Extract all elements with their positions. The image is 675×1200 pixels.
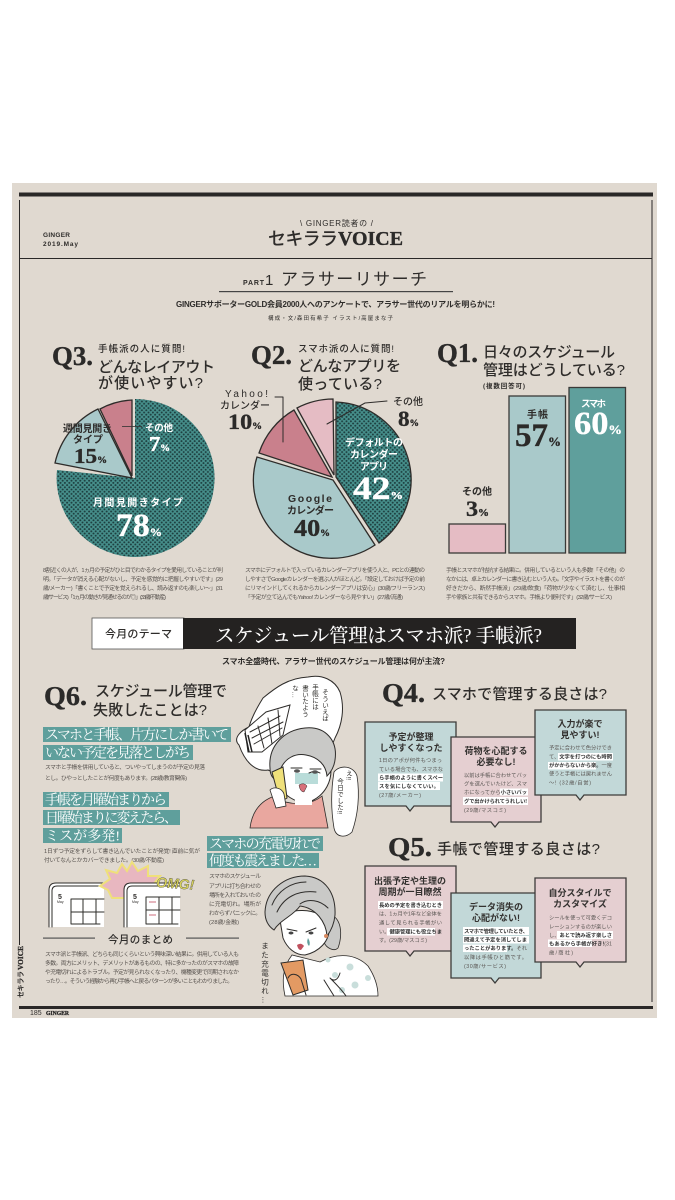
Q2 comment text: スマホにデフォルトで入っているカレンダーアプリを使う人と、PCとの連動の	[245, 566, 425, 574]
highlight: battery: 何度も震えました…	[209, 852, 317, 870]
card: data loss: 間違えて予定を消してしま	[464, 936, 527, 944]
blouse	[283, 955, 378, 996]
pie labels Q3: 週間見開き	[63, 422, 112, 435]
highlight: missed plans: いない予定を見落としがち	[45, 744, 191, 762]
bar labels Q1: 手帳	[527, 408, 548, 421]
card: organized: ら手帳のように書くスペー	[379, 774, 443, 782]
card: overview: す。(29歳/マスコミ)	[379, 936, 427, 944]
comment: missed plans: スマホと手帳を併用していると、ついやってしまうのが予定の見落	[45, 763, 205, 771]
Q3 comment text: 歳/メーカー)「書くことで予定を覚えられるし、読み返すのも楽しい〜」(31	[43, 584, 223, 592]
speech text: 今日でした!!	[336, 777, 344, 814]
card: customize: レーションするのが楽しい	[549, 922, 612, 930]
card: customize: し、あとで読み返す楽しさ	[549, 931, 612, 939]
panel: Q2 app pie	[220, 340, 425, 601]
Q1 heading: Q1.	[437, 338, 478, 368]
pie labels Q2: Google	[288, 493, 332, 505]
Q1 heading: (複数回答可)	[483, 381, 525, 390]
pie labels Q2: カレンダー	[350, 448, 398, 461]
Q1 comment text	[446, 566, 625, 601]
Q6 heading	[44, 681, 227, 719]
Q4 heading	[382, 678, 607, 708]
comment: battery: スマホのスケジュール	[209, 873, 261, 880]
summary heading: 今月のまとめ	[108, 933, 173, 946]
card: customize	[535, 878, 626, 967]
card: customize: 歳/商社)	[549, 948, 573, 956]
summary text: 多数。両方にメリット、デメリットがあるものの、特に多かったのがスマホの故障	[45, 959, 239, 967]
card: luggage: (29歳/マスコミ)	[464, 806, 506, 814]
bar labels Q1: その他	[462, 485, 492, 498]
Q2 heading: Q2.	[251, 340, 292, 370]
theme banner: 今月のテーマ	[105, 626, 172, 640]
page background	[12, 183, 657, 1018]
theme banner	[92, 618, 576, 649]
card: luggage: グで出かけられてうれしい!	[464, 797, 527, 805]
face	[280, 910, 329, 955]
comment: battery	[209, 873, 261, 926]
card: easy input: て、文字を打つのにも時間	[549, 752, 612, 760]
thought text: そういえば	[320, 689, 329, 723]
Q6 heading: Q6.	[44, 681, 87, 711]
Q5 heading: Q5.	[388, 832, 432, 862]
comment: battery: アプリに打ち合わせの	[209, 882, 261, 890]
masthead title: \ GINGER読者の /	[300, 218, 374, 228]
summary text: や充電切れによるトラブル。予定が見られなくなったり、機種変更で同期されなか	[45, 968, 239, 976]
pie labels Q3: 月間見開きタイプ	[93, 497, 183, 509]
Q3 heading	[52, 341, 215, 392]
bar labels Q1: 60%	[574, 406, 622, 442]
Q1 heading: 管理はどうしている?	[483, 361, 625, 379]
pie labels Q2	[220, 389, 423, 542]
section heading	[219, 270, 453, 292]
folio	[30, 1010, 69, 1017]
Q4 heading: スマホで管理する良さは?	[432, 685, 607, 703]
thought text: 書いたよう	[300, 684, 309, 718]
comment: missed plans	[45, 763, 205, 782]
comment: battery: (28歳/金融)	[209, 918, 239, 926]
section heading: アラサーリサーチ	[281, 270, 427, 289]
Q5 heading	[388, 832, 600, 862]
section heading: 1	[265, 272, 273, 289]
card: data loss	[451, 893, 541, 983]
panel: Q5 planner benefits	[365, 832, 626, 983]
illustration: notebook before: May	[57, 900, 64, 904]
card: customize: シールを使って可愛くデコ	[549, 914, 612, 922]
card: easy input: 使うと手帳には戻れません	[549, 770, 612, 778]
illustration: notebook after: 5	[133, 894, 137, 901]
Q1 comment text: なかには、卓上カレンダーに書き込むという人も。「文字やイラストを書くのが	[446, 575, 625, 583]
comment: missed plans: とし。ひやっとしたことが何度もあります。(28歳/教育関係)	[45, 774, 187, 782]
card: overview: は、1ヵ月や1年など全体を	[379, 910, 442, 918]
highlight: week start	[43, 792, 180, 844]
Q3 heading: Q3.	[52, 341, 93, 371]
ponytail	[324, 915, 341, 950]
card: luggage: 必要なし!	[476, 756, 516, 767]
card: organized	[365, 722, 456, 811]
card: easy input	[535, 710, 626, 800]
card: data loss: 心配がない!	[472, 912, 520, 923]
pie labels Q3: 78%	[116, 508, 162, 544]
pie labels Q2: デフォルトの	[345, 436, 403, 449]
pie labels Q3: その他	[145, 422, 173, 434]
thought text	[290, 683, 329, 723]
card: overview: い。健康管理にも役立ちま	[379, 928, 442, 936]
panel: Q3 layout pie	[43, 341, 223, 601]
card: customize: カスタマイズ	[553, 898, 607, 909]
Q2 heading: どんなアプリを	[298, 358, 401, 375]
pie labels Q2: Yahoo!	[225, 389, 268, 400]
bar chart Q1	[449, 388, 626, 553]
phone	[270, 767, 287, 808]
Q1 comment text: 手や家族と共有できるからスマホ。手帳より便利です」(32歳/サービス)	[446, 593, 612, 601]
card: luggage: 以前は手帳に合わせてバッ	[464, 771, 527, 779]
highlight: week start: 手帳を月曜始まりから	[45, 792, 167, 808]
eyes and shadow	[291, 768, 321, 792]
card: organized: スを気にしなくていい。	[379, 782, 439, 790]
Q6 heading: 失敗したことは?	[93, 702, 207, 719]
pie labels Q2: 10%	[228, 409, 262, 434]
pie labels Q2: カレンダー	[220, 399, 270, 412]
folio: 185	[30, 1010, 42, 1017]
panel: Q6 failures	[43, 681, 323, 927]
Q2 heading: 使っている?	[298, 376, 382, 393]
page frame	[19, 192, 653, 1009]
Q5 heading: 手帳で管理する良さは?	[437, 840, 600, 858]
speech bubble	[332, 767, 358, 836]
masthead title	[268, 218, 403, 250]
card: overview: 長めの予定を書き込むとき	[379, 901, 442, 909]
face	[277, 749, 331, 802]
bar labels Q1: 3%	[466, 496, 489, 521]
spine title	[16, 946, 25, 998]
card: overview	[365, 866, 456, 956]
issue label: 2019.May	[43, 241, 78, 248]
card: easy input: 予定に合わせて色分けでき	[549, 744, 612, 752]
illustration: woman on phone	[237, 676, 358, 836]
highlight: battery	[207, 836, 323, 870]
Q1 heading: 日々のスケジュール	[483, 344, 615, 361]
summary text: ったり…。そういう経験から再び手帳へと戻るパターンが多いこともわかりました。	[45, 977, 233, 985]
summary text: スマホ派と手帳派、どちらも同じくらいという興味深い結果に。併用している人も	[45, 950, 239, 958]
pie labels Q2: アプリ	[360, 461, 388, 473]
hair	[270, 728, 335, 780]
card: data loss: データ消失の	[469, 901, 523, 912]
Q2 comment text: にリマインドしてくれるからカレンダーアプリは安心」(30歳/フリーランス)	[245, 584, 425, 592]
card: data loss: スマホで管理していたとき、	[464, 927, 528, 935]
comment: week start	[44, 847, 200, 864]
pie labels Q3: タイプ	[73, 434, 103, 446]
hands	[288, 973, 346, 996]
card: organized: 1日のアポが何件もつまっ	[379, 756, 442, 764]
comment: battery: 場所を入れておいたの	[209, 891, 261, 899]
comment: week start: 1日ずつ予定をずらして書き込んでいたことが発覚! 直前に気が	[44, 847, 200, 855]
card: easy input: 〜! (32歳/自営)	[549, 778, 591, 786]
card: data loss: ったことがあります。それ	[464, 944, 528, 952]
card: customize: もあるから手帳が好き!(31	[549, 940, 612, 948]
pie chart Q3	[55, 399, 215, 557]
Q3 comment text: 明。「データが消える心配がないし、予定を感覚的に把握しやすいです」(29	[43, 575, 223, 583]
card: customize: 自分スタイルで	[548, 887, 612, 898]
section intro: GINGERサポーターGOLD会員2000人へのアンケートで、アラサー世代のリアルを明らかに!	[176, 299, 495, 309]
Q3 heading: どんなレイアウト	[98, 359, 215, 376]
blouse pattern	[326, 958, 371, 993]
vertical caption: また充電切れ…	[260, 942, 270, 1005]
pie labels Q3: 7%	[149, 432, 170, 456]
pie labels Q2: 8%	[398, 406, 419, 431]
credit: 構成・文/森田有希子 イラスト/高屋まな子	[268, 314, 393, 322]
card: luggage: グを選んでいたけど、スマ	[464, 780, 527, 788]
thought text: な…	[290, 685, 299, 698]
folio: GINGER	[46, 1010, 69, 1017]
illustration: OMG lettering: OMG!	[156, 874, 195, 893]
Q3 comment text	[43, 566, 223, 601]
illustration: notebook after: May	[132, 900, 139, 904]
illustration: notebook before	[49, 883, 104, 927]
Q2 comment text: 「予定が立て込んでもYahoo! カレンダーなら見やすい」(27歳/流通)	[245, 593, 403, 601]
body	[250, 796, 328, 828]
thought bubble	[237, 676, 342, 773]
card: organized: しやすくなった	[380, 743, 442, 753]
highlight: missed plans: スマホと手帳、片方にしか書いて	[45, 726, 229, 744]
comment: week start: 付いてなんとかカバーできました。(30歳/不動産)	[44, 856, 164, 864]
card: easy input: 見やすい!	[560, 730, 600, 740]
summary text	[45, 950, 239, 985]
Q3 comment text: 8割近くの人が、1ヵ月の予定がひと目でわかるタイプを愛用していることが判	[43, 566, 223, 574]
bar labels Q1: スマホ	[581, 399, 606, 410]
speech text: え!!	[344, 770, 353, 780]
illustration: notebook before: 5	[58, 894, 62, 901]
thought text: 手帳には	[310, 683, 319, 710]
card: luggage	[451, 737, 541, 827]
comment: battery: わからずパニックに。	[209, 909, 261, 917]
card: overview: 周期が一目瞭然	[378, 886, 442, 897]
facial features	[287, 928, 328, 950]
hair	[265, 876, 335, 936]
panel: Q4 smartphone benefits	[365, 678, 626, 827]
Q3 heading: が使いやすい?	[98, 374, 203, 392]
Q2 heading: スマホ派の人に質問!	[298, 343, 394, 355]
card: easy input: がかからないから楽。一度	[549, 761, 613, 769]
pie labels Q2: カレンダー	[287, 504, 334, 517]
bar labels Q1: 57%	[515, 418, 561, 454]
pie labels Q2: その他	[393, 395, 423, 408]
comment: battery: に充電切れ。場所が	[209, 900, 261, 908]
card: easy input: 入力が楽で	[557, 718, 603, 729]
card: organized: ている場合でも、スマホな	[379, 765, 443, 773]
card: organized: 予定が整理	[388, 731, 434, 742]
orange phone	[281, 960, 308, 995]
Q2 comment text: しやすさでGoogleカレンダーを選ぶ人がほとんど。「設定しておけば予定の前	[245, 575, 425, 583]
section heading: PART	[243, 280, 265, 287]
hair strands	[272, 882, 328, 912]
Q1 comment text: 手帳とスマホが拮抗する結果に。併用しているという人も多数!「その他」の	[446, 566, 625, 574]
highlight: week start: ミスが多発!	[45, 828, 120, 844]
issue label	[43, 232, 78, 248]
highlight: missed plans	[43, 726, 231, 762]
card: overview: 出張予定や生理の	[374, 875, 446, 886]
Q6 heading: スケジュール管理で	[95, 682, 227, 700]
Q3 heading: 手帳派の人に質問!	[98, 343, 185, 355]
masthead title: VOICE	[338, 228, 403, 250]
spine title: VOICE	[16, 946, 25, 970]
Q3 comment text: 歳/サービス)「1ヵ月の動きが見通せるのが◎」(33歳/不動産)	[43, 593, 166, 601]
bar labels Q1	[462, 399, 622, 521]
open planner	[245, 705, 290, 752]
illustration: notebook after	[124, 883, 180, 927]
illustration: woman with dead phone	[260, 876, 378, 1005]
card: luggage: 荷物を心配する	[464, 745, 528, 756]
masthead title: セキララ	[268, 229, 338, 249]
illustration: burst	[100, 862, 164, 898]
Q1 heading	[437, 338, 625, 390]
highlight: battery: スマホの充電切れで	[209, 836, 321, 852]
card: data loss: (30歳/サービス)	[464, 962, 506, 970]
speech text	[336, 770, 353, 814]
pie chart Q2	[253, 399, 411, 558]
card: data loss: 以降は手帳ひと筋です。	[464, 953, 527, 961]
pie labels Q2: 42 %	[353, 471, 403, 507]
pie labels Q3	[63, 422, 183, 544]
spine title: セキララ	[17, 971, 25, 998]
card: luggage: ホになってから小さいバッ	[464, 788, 527, 796]
highlight: week start: 日曜始まりに変えたら、	[45, 810, 178, 826]
Q2 heading	[251, 340, 401, 393]
Q1 comment text: 好きだから、断然手帳派」(29歳/飲食)「荷物が少なくて済むし、仕事相	[446, 584, 625, 592]
card: overview: 通して見られる手帳がい	[379, 918, 442, 926]
theme subtitle: スマホ全盛時代、アラサー世代のスケジュール管理は何が主流?	[222, 656, 445, 666]
Q4 heading: Q4.	[382, 678, 425, 708]
summary	[43, 933, 239, 985]
pie labels Q2: 40%	[294, 516, 330, 542]
panel: Q1 bar chart	[437, 338, 626, 601]
issue label: GINGER	[43, 232, 70, 239]
theme banner: スケジュール管理はスマホ派? 手帳派?	[215, 625, 542, 647]
Q2 comment text	[245, 566, 425, 601]
pie labels Q3: 15%	[74, 444, 107, 468]
card: organized: (27歳/メーカー)	[379, 791, 421, 799]
